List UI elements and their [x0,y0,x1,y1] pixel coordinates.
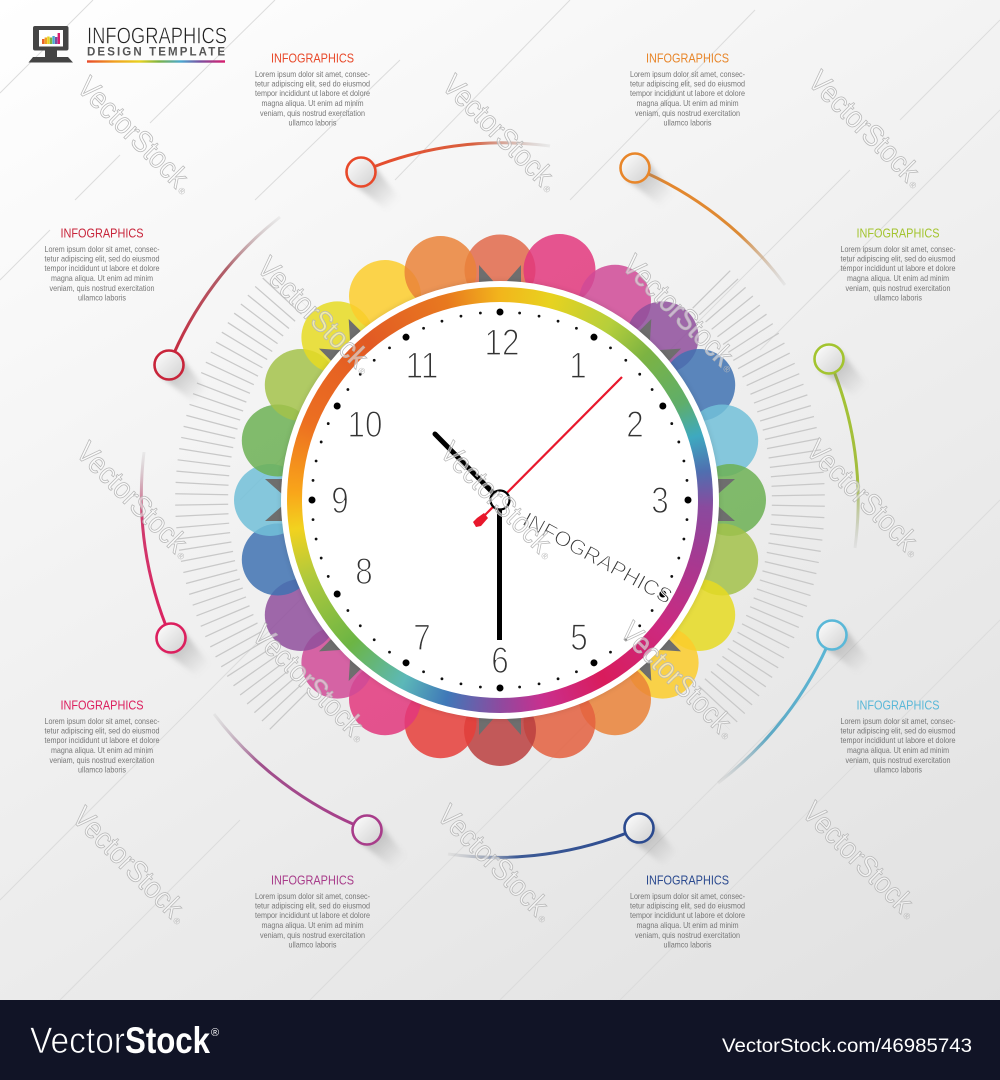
text block: left lower: tempor incididunt ut labore et dolore [44,735,160,745]
watermarks: VectorStock [431,799,555,923]
watermarks: ® [176,185,188,197]
watermarks: ® [901,910,913,922]
watermarks: ® [175,550,187,562]
text block: bottom right: INFOGRAPHICS [646,872,729,888]
text block: right lower: magna aliqua. Ut enim ad minim [847,745,949,755]
hour numerals: 5 [570,618,588,659]
hour numerals: 7 [413,618,431,659]
text block: top left: Lorem ipsum dolor sit amet, consec- [255,69,370,79]
text block: right lower: INFOGRAPHICS [856,698,940,712]
text block: top right: veniam, quis nostrud exercitation [635,108,740,118]
text block: right upper [840,226,956,302]
text block: bottom right: tetur adipiscing elit, sed do eiusmod [630,900,745,910]
hour numerals: 8 [355,552,373,593]
text block: top left: tempor incididunt ut labore et dolore [255,88,370,98]
white clock face [302,302,698,698]
text block: right lower: tetur adipiscing elit, sed do eiusmod [840,726,956,736]
text block: left lower [44,698,160,774]
watermarks: ® [907,179,919,191]
text block: top left: ullamco laboris [288,118,336,128]
header logo [28,22,227,63]
text block: right upper: INFOGRAPHICS [856,226,940,240]
text block: left upper: Lorem ipsum dolor sit amet, consec- [44,244,160,254]
hour numerals: 2 [626,405,644,446]
text block: left lower: INFOGRAPHICS [60,698,144,712]
text block: top right: tempor incididunt ut labore et dolore [630,88,745,98]
text block: left upper [44,226,160,302]
text block: left lower: ullamco laboris [78,764,126,774]
timeline arc 7 with node [141,452,213,680]
text block: left upper: magna aliqua. Ut enim ad minim [51,273,153,283]
hour numerals: 3 [651,481,669,522]
timeline arc 4 with node [718,620,874,783]
watermarks [66,65,932,931]
grey triangles between petals [265,265,735,735]
clock ring [281,281,719,719]
hour numerals: 6 [491,641,509,682]
text block: left upper: INFOGRAPHICS [60,226,144,240]
text block: top right: magna aliqua. Ut enim ad minim [636,98,739,108]
text block: right upper: tempor incididunt ut labore et dolore [840,263,956,273]
footer brand bold: Stock [125,1020,210,1061]
minute dots [312,312,688,688]
text block: left lower: magna aliqua. Ut enim ad minim [51,745,153,755]
text block: right upper: Lorem ipsum dolor sit amet, consec- [840,244,956,254]
text block: right lower: ullamco laboris [874,764,922,774]
text block: bottom left [255,872,370,950]
timeline arc 5 with node [448,814,681,870]
watermarks: VectorStock [434,436,558,560]
text block: top left: INFOGRAPHICS [271,50,354,66]
text block: right lower: Lorem ipsum dolor sit amet, consec- [840,716,956,726]
text block: top right [630,50,745,128]
second hand [473,377,622,527]
watermarks: VectorStock [70,436,194,560]
text block: left lower: veniam, quis nostrud exercitation [50,755,155,765]
text block: bottom left: veniam, quis nostrud exercitation [260,930,365,940]
text block: bottom left: ullamco laboris [288,940,336,950]
timeline arc 1 with node [346,143,550,214]
text block: bottom right: tempor incididunt ut labore et dolore [630,910,745,920]
watermarks: VectorStock [800,434,924,558]
hour numerals: 1 [569,346,587,387]
hour numerals: 11 [406,346,438,387]
text block: bottom right: veniam, quis nostrud exercitation [635,930,740,940]
timeline arc 2 with node [620,154,785,285]
icon: monitor [28,26,73,62]
text block: bottom right: ullamco laboris [664,940,712,950]
watermarks: ® [351,733,363,745]
text block: right lower: tempor incididunt ut labore et dolore [840,735,956,745]
watermarks: VectorStock [796,796,920,920]
radial tick fan left [202,289,289,711]
text block: top left: veniam, quis nostrud exercitation [260,108,365,118]
text block: right upper: magna aliqua. Ut enim ad minim [847,273,949,283]
timeline arc 3 with node [814,344,871,548]
watermarks: VectorStock [802,65,926,189]
clock dial [312,312,688,688]
minute hand [497,500,502,640]
text block: right upper: ullamco laboris [874,292,922,302]
text block: bottom left: tempor incididunt ut labore et dolore [255,910,370,920]
text block: left lower: Lorem ipsum dolor sit amet, consec- [44,716,160,726]
text block: right upper: veniam, quis nostrud exercitation [846,283,951,293]
footer url: VectorStock.com/46985743 [722,1036,972,1057]
watermarks: ® [541,183,553,195]
watermarks: ® [539,550,551,562]
timeline arc 8 with node [154,217,280,407]
watermarks: VectorStock [251,251,375,375]
rainbow band [287,287,713,713]
text block: bottom right [630,872,745,950]
hour dots [312,312,688,688]
logo subtitle: DESIGN TEMPLATE [87,46,225,58]
hour hand [435,434,500,500]
hour numerals: 9 [331,481,349,522]
text block: bottom left: Lorem ipsum dolor sit amet, consec- [255,891,370,901]
timeline arc 6 with node [214,714,409,872]
footer brand: Vector [30,1020,125,1061]
text block: top left [255,50,370,128]
hour numerals: 10 [348,405,382,446]
watermarks: VectorStock [246,619,370,743]
text block: left upper: ullamco laboris [78,292,126,302]
text block: right upper: tetur adipiscing elit, sed do eiusmod [840,254,956,264]
text block: bottom left: tetur adipiscing elit, sed do eiusmod [255,900,370,910]
watermarks: ® [356,365,368,377]
watermarks: VectorStock [614,616,738,740]
center hub [490,490,510,510]
watermarks: VectorStock [71,71,195,195]
footer bar [0,1000,1000,1080]
text block: right lower [840,698,956,774]
watermarks: VectorStock [616,249,740,373]
text block: left upper: tetur adipiscing elit, sed do eiusmod [44,254,160,264]
watermarks: ® [721,363,733,375]
text block: top left: tetur adipiscing elit, sed do eiusmod [255,78,370,88]
text block: top right: tetur adipiscing elit, sed do eiusmod [630,78,745,88]
text block: right lower: veniam, quis nostrud exercitation [846,755,951,765]
text block: top right: ullamco laboris [664,118,712,128]
watermarks: ® [905,548,917,560]
hour numerals [331,323,669,682]
radial tick fan right [711,289,798,711]
text block: top right: Lorem ipsum dolor sit amet, consec- [630,69,745,79]
text block: bottom left: magna aliqua. Ut enim ad minim [262,920,364,930]
hour numerals: 12 [485,323,519,364]
text block: top right: INFOGRAPHICS [646,50,729,66]
registered mark: ® [211,1027,219,1039]
watermarks: ® [171,915,183,927]
colored petals around the clock [234,234,766,766]
text block: left upper: tempor incididunt ut labore et dolore [44,263,160,273]
text block: left lower: tetur adipiscing elit, sed do eiusmod [44,726,160,736]
rainbow bar [87,60,225,63]
clock face label: INFOGRAPHICS [519,508,676,609]
watermarks: VectorStock [436,69,560,193]
logo title: INFOGRAPHICS [87,22,227,48]
text block: top left: magna aliqua. Ut enim ad minim [262,98,364,108]
text block: bottom left: INFOGRAPHICS [271,872,354,888]
text block: bottom right: Lorem ipsum dolor sit amet, consec- [630,891,745,901]
watermarks: ® [536,913,548,925]
text block: left upper: veniam, quis nostrud exercitation [50,283,155,293]
watermarks: VectorStock [66,801,190,925]
text block: bottom right: magna aliqua. Ut enim ad minim [636,920,739,930]
watermarks: ® [719,730,731,742]
